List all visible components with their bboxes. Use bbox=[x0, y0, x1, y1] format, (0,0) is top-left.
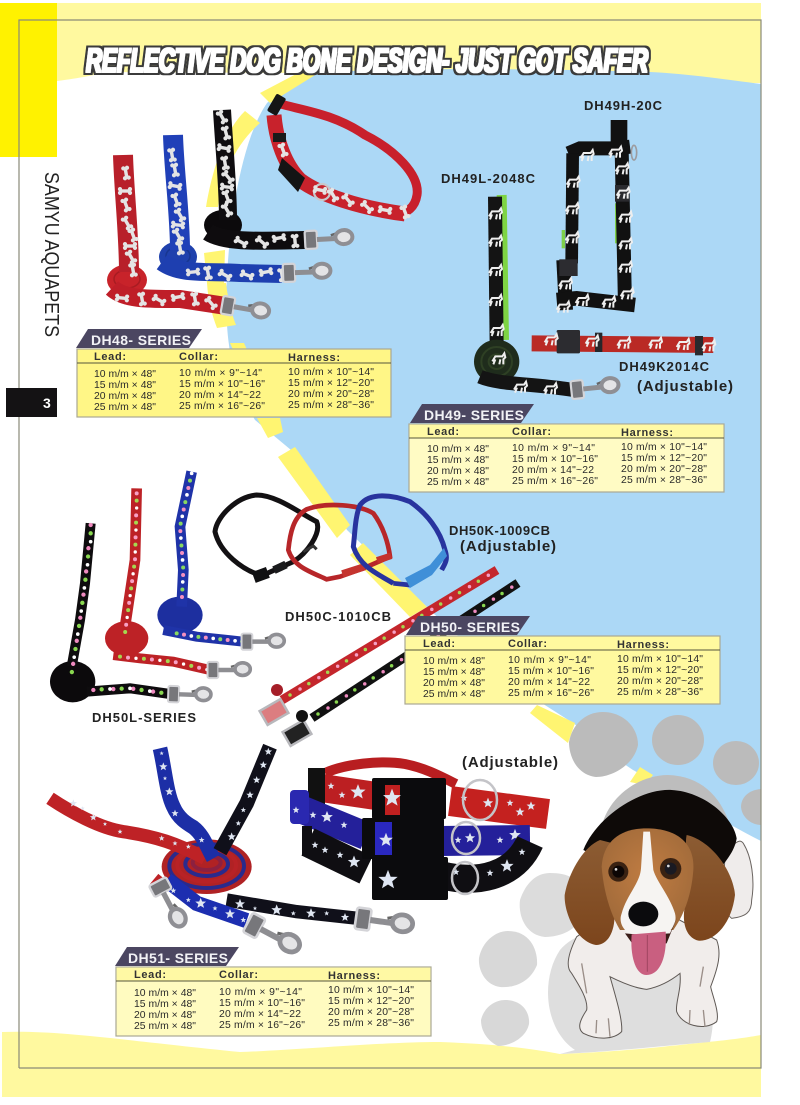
red lead strap bbox=[50, 798, 205, 858]
spec table: DH50: Collar: bbox=[508, 638, 547, 650]
spec table: DH50: 10 m/m × 48" bbox=[423, 656, 485, 667]
spec table: DH48: 25 m/m × 28"~36" bbox=[288, 400, 374, 411]
product: DH48 leads and collar bbox=[107, 93, 417, 322]
red collar bbox=[288, 505, 392, 579]
red collar with dog print bbox=[532, 330, 715, 355]
product label: DH50K-1009CB: DH50K-1009CB bbox=[449, 523, 550, 538]
spec table: DH49: 20 m/m × 20"~28" bbox=[621, 464, 707, 475]
product: DH51 star leads bbox=[50, 747, 414, 959]
spec table: DH51: 25 m/m × 16"~26" bbox=[219, 1020, 305, 1031]
spec table: DH48: 15 m/m × 10"~16" bbox=[179, 379, 265, 390]
blue collar bbox=[353, 496, 446, 585]
spec table: DH48: 15 m/m × 12"~20" bbox=[288, 378, 374, 389]
spec table: DH49: 15 m/m × 12"~20" bbox=[621, 453, 707, 464]
blue star lead bbox=[157, 472, 284, 650]
series badge: DH50 bbox=[406, 616, 530, 635]
brand name vertical: SAMYU AQUAPETS bbox=[40, 172, 62, 337]
spec table: DH50: 20 m/m × 20"~28" bbox=[617, 676, 703, 687]
spec table: DH51: Collar: bbox=[219, 969, 258, 981]
long black cat collar bbox=[283, 583, 518, 746]
black back bbox=[583, 790, 737, 867]
spec table: DH49: 15 m/m × 48" bbox=[427, 455, 489, 466]
spec table: DH50: 25 m/m × 16"~26" bbox=[508, 688, 594, 699]
coil bbox=[162, 839, 252, 894]
spec table: DH51: 10 m/m × 48" bbox=[134, 988, 196, 999]
background: large blue shape bbox=[226, 69, 761, 841]
background: bright yellow corner block bbox=[0, 3, 57, 157]
page number tab: 3 bbox=[43, 395, 51, 411]
series badge: DH49 bbox=[410, 404, 534, 423]
spec table: DH48: Harness: bbox=[288, 352, 340, 364]
spec table: DH50: Harness: bbox=[617, 639, 669, 651]
spec table: DH49: 10 m/m × 9"~14" bbox=[512, 443, 595, 454]
spec table: DH48: 15 m/m × 48" bbox=[94, 380, 156, 391]
spec table: DH48: 10 m/m × 48" bbox=[94, 369, 156, 380]
black tail bbox=[227, 899, 414, 937]
blue bone lead bbox=[159, 135, 331, 283]
spec table: DH49: Harness: bbox=[621, 427, 673, 439]
black collar bbox=[302, 826, 530, 879]
product label: DH49H-20C: DH49H-20C bbox=[584, 98, 663, 113]
black buckles bbox=[362, 778, 448, 900]
product label: DH49K2014C: DH49K2014C bbox=[619, 359, 710, 374]
spec table: DH51: 15 m/m × 10"~16" bbox=[219, 998, 305, 1009]
face bbox=[602, 828, 693, 930]
red tail clasp bbox=[149, 877, 190, 931]
beagle photo bbox=[565, 790, 753, 1038]
spec table: DH48: 25 m/m × 16"~26" bbox=[179, 401, 265, 412]
spec table: DH51: 20 m/m × 48" bbox=[134, 1010, 196, 1021]
mouth bbox=[625, 917, 677, 945]
spec table: DH49: 10 m/m × 10"~14" bbox=[621, 442, 707, 453]
spec table: DH50: 15 m/m × 10"~16" bbox=[508, 666, 594, 677]
spec table: DH48: 10 m/m × 10"~14" bbox=[288, 367, 374, 378]
red bone collar bbox=[267, 93, 417, 220]
page number tab bbox=[6, 388, 57, 417]
white blaze and muzzle bbox=[621, 832, 676, 940]
spec table: DH49: Lead: bbox=[427, 426, 459, 438]
nose bbox=[628, 902, 658, 926]
background: yellow dashed arc bbox=[204, 72, 653, 785]
spec table: DH50: 20 m/m × 14"~22 bbox=[508, 677, 590, 688]
series badge: DH51 bbox=[115, 947, 239, 966]
spec table: DH50: 25 m/m × 48" bbox=[423, 689, 485, 700]
spec table: DH50 bbox=[405, 636, 720, 704]
spec table: DH51: 15 m/m × 12"~20" bbox=[328, 996, 414, 1007]
black collar bbox=[215, 495, 318, 583]
spec table: DH49: 25 m/m × 28"~36" bbox=[621, 475, 707, 486]
spec table: DH51 bbox=[116, 967, 431, 1036]
spec table: DH50: 10 m/m × 10"~14" bbox=[617, 654, 703, 665]
blue collar bbox=[290, 790, 530, 843]
spec table: DH49 bbox=[409, 424, 724, 492]
lead with green lining bbox=[474, 195, 620, 399]
spec table: DH48: 20 m/m × 20"~28" bbox=[288, 389, 374, 400]
blue tail bbox=[167, 880, 303, 959]
tongue bbox=[631, 932, 666, 975]
harness bbox=[557, 120, 637, 313]
red bone lead bbox=[107, 155, 270, 322]
spec table: DH51: 10 m/m × 10"~14" bbox=[328, 985, 414, 996]
eyes bbox=[608, 858, 681, 882]
spec table: DH49: 10 m/m × 48" bbox=[427, 444, 489, 455]
spec table: DH48: 20 m/m × 48" bbox=[94, 391, 156, 402]
spec table: DH48: 20 m/m × 14"~22 bbox=[179, 390, 261, 401]
spec table: DH51: 20 m/m × 14"~22 bbox=[219, 1009, 301, 1020]
series badge: DH51: DH51- SERIES bbox=[128, 950, 228, 966]
series badge: DH49: DH49- SERIES bbox=[424, 407, 524, 423]
spec table: DH51: Harness: bbox=[328, 970, 380, 982]
series badge: DH48 bbox=[76, 329, 202, 348]
spec table: DH48 bbox=[77, 349, 391, 417]
spec table: DH49: 25 m/m × 48" bbox=[427, 477, 489, 488]
spec table: DH51: 10 m/m × 9"~14" bbox=[219, 987, 302, 998]
product: DH50 star collars and leads bbox=[50, 472, 446, 704]
blue lead strap bbox=[159, 748, 213, 858]
red short clasp strap bbox=[153, 877, 162, 887]
chest and legs bbox=[568, 917, 719, 1038]
spec table: DH49: 20 m/m × 14"~22 bbox=[512, 465, 594, 476]
spec table: DH50: Lead: bbox=[423, 638, 455, 650]
product label: adjustable: (Adjustable) bbox=[462, 754, 558, 771]
spec table: DH48: Collar: bbox=[179, 351, 218, 363]
spec table: DH48: 10 m/m × 9"~14" bbox=[179, 368, 262, 379]
product label: adjustable: (Adjustable) bbox=[460, 538, 556, 555]
paw print pads bbox=[479, 712, 761, 1054]
black bone lead bbox=[204, 109, 353, 250]
product: DH51 adjustable star collars bbox=[290, 762, 548, 900]
spec table: DH50: 15 m/m × 12"~20" bbox=[617, 665, 703, 676]
black star lead bbox=[50, 523, 211, 704]
product label: DH50C-1010CB: DH50C-1010CB bbox=[285, 609, 391, 624]
spec table: DH50: 15 m/m × 48" bbox=[423, 667, 485, 678]
background: white cut of the top band bbox=[57, 72, 300, 130]
ears bbox=[565, 835, 735, 945]
spec table: DH50: 10 m/m × 9"~14" bbox=[508, 655, 591, 666]
paw shading bbox=[582, 963, 705, 1037]
red star lead bbox=[105, 488, 250, 678]
red collar bbox=[308, 762, 548, 816]
long red cat collar bbox=[260, 570, 497, 725]
spec table: DH48: Lead: bbox=[94, 351, 126, 363]
product label: adjustable: (Adjustable) bbox=[637, 378, 733, 395]
spec table: DH50: 25 m/m × 28"~36" bbox=[617, 687, 703, 698]
spec table: DH50: 20 m/m × 48" bbox=[423, 678, 485, 689]
product label: DH49L-2048C: DH49L-2048C bbox=[441, 171, 536, 186]
product label: DH50L-SERIES: DH50L-SERIES bbox=[92, 710, 196, 725]
spec table: DH48: 25 m/m × 48" bbox=[94, 402, 156, 413]
spec table: DH51: 20 m/m × 20"~28" bbox=[328, 1007, 414, 1018]
spec table: DH51: Lead: bbox=[134, 969, 166, 981]
black lead strap bbox=[220, 747, 272, 852]
spec table: DH51: 15 m/m × 48" bbox=[134, 999, 196, 1010]
series badge: DH50: DH50- SERIES bbox=[420, 619, 520, 635]
spec table: DH49: Collar: bbox=[512, 426, 551, 438]
spec table: DH49: 15 m/m × 10"~16" bbox=[512, 454, 598, 465]
hind leg bbox=[724, 841, 753, 918]
spec table: DH51: 25 m/m × 48" bbox=[134, 1021, 196, 1032]
D rings bbox=[452, 780, 497, 894]
spec table: DH49: 25 m/m × 16"~26" bbox=[512, 476, 598, 487]
blue collar buckle bbox=[405, 548, 447, 588]
series badge: DH48: DH48- SERIES bbox=[91, 332, 191, 348]
spec table: DH49: 20 m/m × 48" bbox=[427, 466, 489, 477]
spec table: DH51: 25 m/m × 28"~36" bbox=[328, 1018, 414, 1029]
product: DH49 dog print items bbox=[474, 120, 715, 399]
